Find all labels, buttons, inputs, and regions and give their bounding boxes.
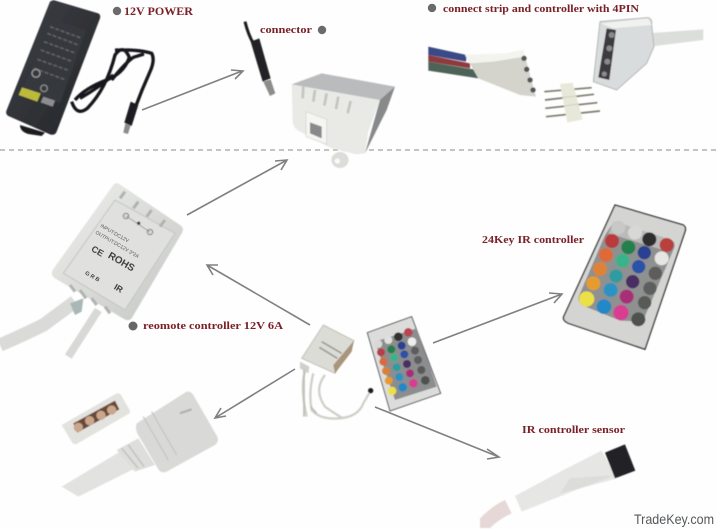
heading: connector: connector xyxy=(260,25,312,36)
icon: 24-key IR remote xyxy=(563,205,686,349)
icon: full kit with controller and mini remote xyxy=(300,317,441,419)
icon: IR controller sensor xyxy=(480,444,635,528)
mini remote xyxy=(367,317,441,411)
heading: reomote controller 12V 6A: reomote controller 12V 6A xyxy=(143,321,283,332)
mini controller xyxy=(302,325,354,373)
device markings: G R B xyxy=(84,271,100,284)
arrow: small remote to large remote xyxy=(433,293,562,343)
device markings xyxy=(84,223,141,295)
heading: connector xyxy=(260,25,326,36)
icon: white 4-pin connector and socket xyxy=(62,391,218,497)
device markings: OUTPUT:DC12V 3*2A xyxy=(94,230,141,260)
arrow: kit to IR sensor xyxy=(375,407,499,459)
arrow: controller to connector box xyxy=(187,160,287,215)
heading: 24Key IR controller: 24Key IR controller xyxy=(482,235,584,246)
icon: controller box side view xyxy=(292,73,395,168)
icon: 12V power adapter xyxy=(6,0,153,136)
arrow: kit to 4-pin connector xyxy=(215,369,295,418)
icon: 4-pin plug, header and socket xyxy=(428,18,703,123)
arrow: kit to large controller xyxy=(207,265,310,325)
device markings: CE xyxy=(90,244,105,259)
arrow: adapter to connector xyxy=(142,70,243,110)
heading: 12V POWER: 12V POWER xyxy=(124,6,194,18)
device markings: INPUT:DC12V xyxy=(99,223,130,245)
heading: IR controller sensor: IR controller sensor xyxy=(522,425,625,436)
icon: DC connector plug xyxy=(245,22,275,96)
dashed divider xyxy=(0,149,716,151)
device markings: IR xyxy=(112,282,125,295)
heading: connect strip and controller: connect strip and controller with 4PIN xyxy=(443,4,639,15)
device markings: ROHS xyxy=(106,250,137,275)
icon: large RGB controller with cables xyxy=(0,183,183,357)
